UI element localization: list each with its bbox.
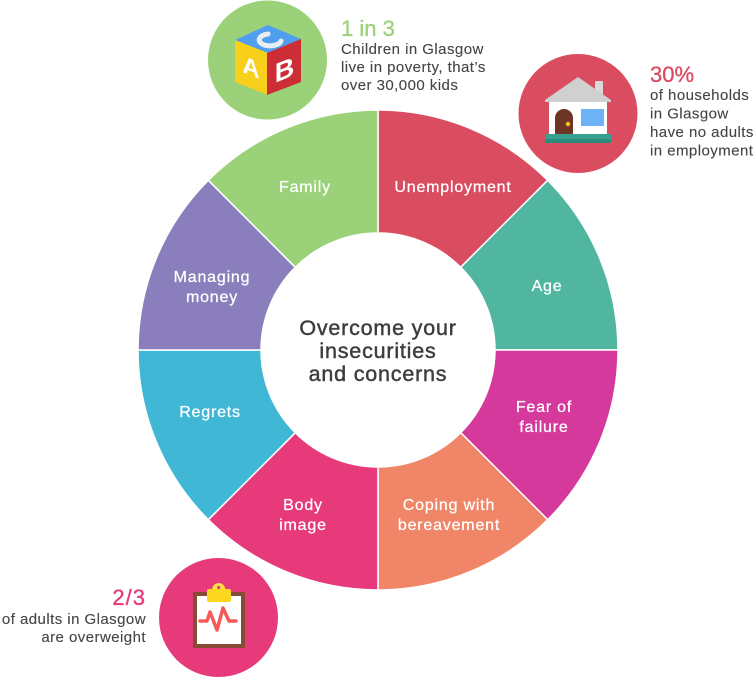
description: households: have no adults — [650, 124, 754, 141]
label: Body image: Body — [283, 497, 323, 514]
description: adults: are overweight — [41, 629, 146, 646]
label: Fear of failure: failure — [519, 419, 569, 436]
label: Family: Family — [279, 179, 331, 196]
label: Managing money: Managing — [174, 269, 250, 286]
icon: ABC block badge — [208, 0, 327, 120]
donut chart — [138, 110, 618, 590]
label: Body image: image — [279, 517, 327, 534]
segment: Body image — [208, 433, 378, 590]
description: children: live in poverty, that’s — [341, 59, 486, 76]
segment: Managing money — [138, 180, 295, 350]
label: Age: Age — [532, 278, 562, 295]
stat: 30%: 30% — [650, 62, 694, 87]
description: children: over 30,000 kids — [341, 77, 458, 94]
label: Coping with bereavement: bereavement — [398, 517, 500, 534]
label: Coping with bereavement: Coping with — [403, 497, 495, 514]
segment: Fear of failure — [461, 350, 618, 520]
icon: ABC block badge: A — [242, 51, 260, 85]
segment: Coping with bereavement — [378, 433, 548, 590]
segment: Age — [461, 180, 618, 350]
stat: 1 in 3: 1 in 3 — [341, 16, 395, 41]
segment: Regrets — [138, 350, 295, 520]
description: households: in employment — [650, 142, 754, 160]
segment: Unemployment — [378, 110, 548, 267]
icon: ABC block badge: B — [275, 51, 294, 89]
center heading: insecurities — [319, 339, 437, 363]
description: households: in Glasgow — [650, 106, 729, 122]
callout: 2/3 — [2, 585, 146, 646]
center heading: and concerns — [309, 362, 447, 386]
callout: 1 in 3 — [341, 16, 486, 94]
segment: Family — [208, 110, 378, 267]
label: Managing money: money — [186, 289, 238, 306]
description: children: Children in Glasgow — [341, 41, 484, 58]
label: Unemployment: Unemployment — [394, 179, 512, 196]
stat: 2/3: 2/3 — [112, 585, 146, 610]
label: Regrets: Regrets — [179, 404, 241, 421]
description: households: of households — [650, 87, 749, 104]
description: adults: of adults in Glasgow — [2, 611, 146, 628]
callout: 30% — [650, 62, 754, 160]
icon: house badge — [518, 54, 638, 173]
center heading: Overcome your — [299, 316, 457, 340]
icon: clipboard badge — [159, 558, 278, 677]
label: Fear of failure: Fear of — [516, 399, 572, 416]
